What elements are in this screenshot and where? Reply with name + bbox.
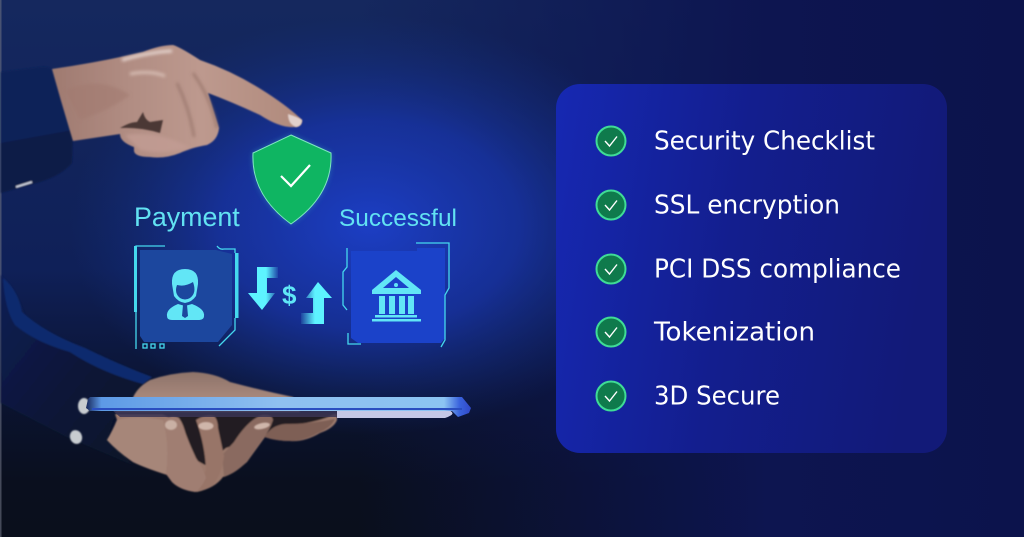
three small squares	[143, 344, 164, 348]
label: Payment: Payment	[134, 202, 240, 232]
shield with check	[253, 135, 331, 224]
item: 3D Secure	[596, 382, 780, 412]
item: 3D Secure: 3D Secure	[654, 382, 780, 412]
icon: bank building	[372, 270, 421, 322]
tablet	[86, 397, 471, 418]
lower hand holding tablet	[107, 372, 337, 492]
panel: security checklist	[556, 84, 947, 453]
left card: payer	[134, 246, 238, 349]
item: SSL encryption: SSL encryption	[654, 190, 840, 220]
transfer arrows with dollar	[248, 267, 332, 324]
label: Successful: Successful	[339, 205, 457, 232]
lower sleeve	[1, 275, 153, 465]
upper sleeve	[1, 67, 73, 193]
item: Tokenization: Tokenization	[653, 318, 815, 348]
item: PCI DSS compliance: PCI DSS compliance	[654, 254, 901, 284]
transfer arrows with dollar: $	[282, 280, 297, 310]
upper pointing hand	[52, 45, 302, 158]
item: Security Checklist: Security Checklist	[654, 126, 875, 156]
cufflinks	[68, 398, 90, 446]
icon: person	[167, 269, 204, 320]
right card: bank	[343, 243, 449, 347]
